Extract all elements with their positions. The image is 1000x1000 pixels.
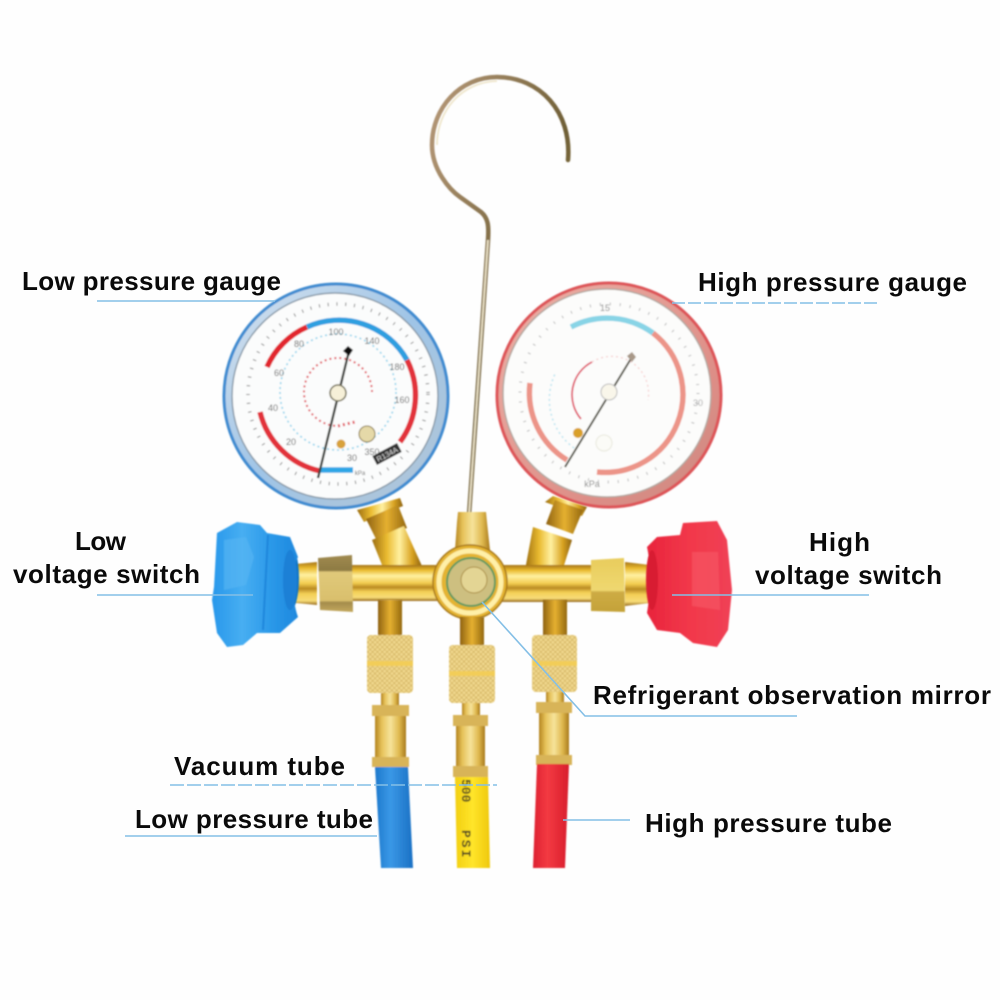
ferrule rings: low	[372, 705, 409, 767]
low voltage switch knob	[212, 522, 299, 647]
scale numbers: low: 180	[389, 362, 405, 372]
knurled coupler: vacuum	[449, 645, 495, 703]
brass pin: low	[336, 440, 346, 448]
label: Low voltage switch	[13, 526, 200, 589]
neck: high	[546, 692, 564, 703]
gauge bezel: high	[497, 283, 721, 507]
hook rod	[432, 77, 568, 515]
coloured scale arcs: low	[260, 320, 415, 471]
knob body: red	[647, 521, 732, 647]
scale numbers: low: 60	[274, 368, 284, 378]
ferrule rings: high	[536, 702, 572, 765]
tube print 500: 500	[458, 779, 473, 803]
needle: high	[565, 357, 632, 467]
needle tip: high	[627, 352, 636, 362]
knob body: blue	[212, 522, 298, 647]
coupler groove: high	[532, 661, 577, 666]
vacuum hose assembly	[449, 617, 495, 868]
inner scales: low	[280, 334, 396, 450]
left nut	[318, 555, 353, 612]
label: High voltage switch: voltage switch	[755, 560, 942, 590]
gauge face: high	[503, 289, 711, 497]
leader: low voltage switch	[97, 594, 253, 596]
right nut	[591, 558, 625, 612]
scale numbers: high: 15	[600, 303, 610, 313]
scale numbers: low	[268, 327, 410, 477]
scale numbers: low: 40	[268, 403, 278, 413]
scale numbers: low: 140	[364, 336, 380, 346]
crimp ferrule: vacuum	[456, 718, 485, 774]
top collar	[455, 512, 490, 550]
scale numbers: low: 20	[286, 437, 296, 447]
right gauge thread	[546, 500, 583, 534]
leader lines	[97, 301, 878, 836]
low pressure gauge	[224, 284, 448, 508]
leader: refrigerant observation mirror	[482, 602, 797, 716]
tick marks: low	[248, 304, 428, 484]
leader: low pressure tube	[125, 835, 377, 837]
scale numbers: low: 100	[328, 327, 344, 337]
left gauge thread	[366, 505, 407, 541]
neck: low	[381, 693, 399, 706]
stem: high	[543, 600, 567, 636]
label: Low voltage switch: voltage switch	[13, 559, 200, 589]
coloured scale arcs: high	[529, 318, 683, 472]
scale numbers: low: 160	[394, 395, 410, 405]
sight glass reflection	[461, 567, 487, 593]
brass pin: high	[573, 428, 583, 438]
stem: low	[378, 600, 402, 636]
leader: vacuum tube	[170, 784, 497, 786]
label: Refrigerant observation mirror: Refrigerant observation mirror	[593, 680, 991, 710]
leader: high voltage switch	[672, 594, 869, 596]
ferrule rings: vacuum	[453, 715, 488, 777]
label: High pressure gauge: High pressure gauge	[698, 267, 967, 297]
leader: high pressure gauge	[672, 302, 878, 304]
screw: high	[596, 435, 612, 451]
right tube stub	[625, 562, 650, 606]
needle tip: low	[343, 346, 353, 356]
knob ridge: blue	[263, 535, 268, 630]
screw: low	[359, 426, 375, 442]
knurled coupler: high	[532, 635, 577, 692]
label: High voltage switch	[755, 527, 942, 590]
label: Low pressure tube: Low pressure tube	[135, 804, 373, 834]
neck: vacuum	[462, 703, 480, 716]
knob highlight: red	[692, 552, 720, 610]
scale numbers: low: 350	[364, 447, 380, 457]
label: High voltage switch: High	[809, 527, 870, 557]
inner scales: high	[549, 356, 649, 448]
crimp ferrule: low	[375, 708, 406, 764]
manifold body	[285, 496, 650, 619]
needle hub: low	[330, 385, 346, 401]
knob highlight: blue	[224, 537, 254, 590]
sight glass housing	[433, 545, 507, 619]
coupler groove: vacuum	[449, 671, 495, 676]
high voltage switch knob	[646, 521, 732, 647]
sight glass housing highlight	[439, 551, 501, 613]
right bar	[500, 565, 592, 602]
tube print PSI: PSI	[458, 830, 473, 859]
gauge bezel: low	[224, 284, 448, 508]
gauge face: low	[232, 293, 438, 499]
high pressure hose assembly	[532, 600, 577, 868]
knob inner wall: blue	[283, 550, 297, 610]
label: Low voltage switch: Low	[75, 526, 127, 556]
right gauge collar	[545, 496, 587, 516]
scale numbers: high	[584, 303, 703, 489]
label: High pressure tube: High pressure tube	[645, 808, 892, 838]
low pressure hose assembly	[367, 600, 413, 868]
knob cavity: blue	[275, 541, 299, 615]
scale numbers: low: kPa	[355, 471, 366, 477]
right branch	[525, 527, 572, 578]
yellow tube	[455, 777, 490, 868]
tick marks: high	[520, 304, 698, 482]
sight glass ring	[447, 558, 495, 606]
scale numbers: high: kPa	[584, 479, 600, 489]
knurled coupler: low	[367, 635, 413, 693]
left branch	[372, 526, 422, 578]
scale numbers: low: 80	[294, 339, 304, 349]
label: Vacuum tube: Vacuum tube	[174, 751, 345, 781]
label: Low pressure gauge: Low pressure gauge	[22, 266, 281, 296]
red tube	[533, 764, 569, 868]
leader: low pressure gauge	[97, 300, 275, 302]
model badge: low: R134A	[375, 445, 399, 464]
leader: high pressure tube	[563, 819, 630, 821]
crimp ferrule: high	[539, 705, 569, 761]
left tube stub	[285, 562, 317, 605]
high pressure gauge	[497, 283, 721, 507]
scale numbers: low: 30	[347, 453, 357, 463]
blue tube	[375, 767, 413, 868]
knob inner wall: red	[646, 550, 658, 610]
coupler groove: low	[367, 661, 413, 666]
left bar	[350, 565, 440, 601]
scale numbers: high: 30	[693, 398, 703, 408]
left gauge collar	[357, 498, 403, 522]
stem: vacuum	[460, 617, 484, 647]
needle hub: high	[601, 384, 617, 400]
needle: low	[318, 351, 349, 478]
